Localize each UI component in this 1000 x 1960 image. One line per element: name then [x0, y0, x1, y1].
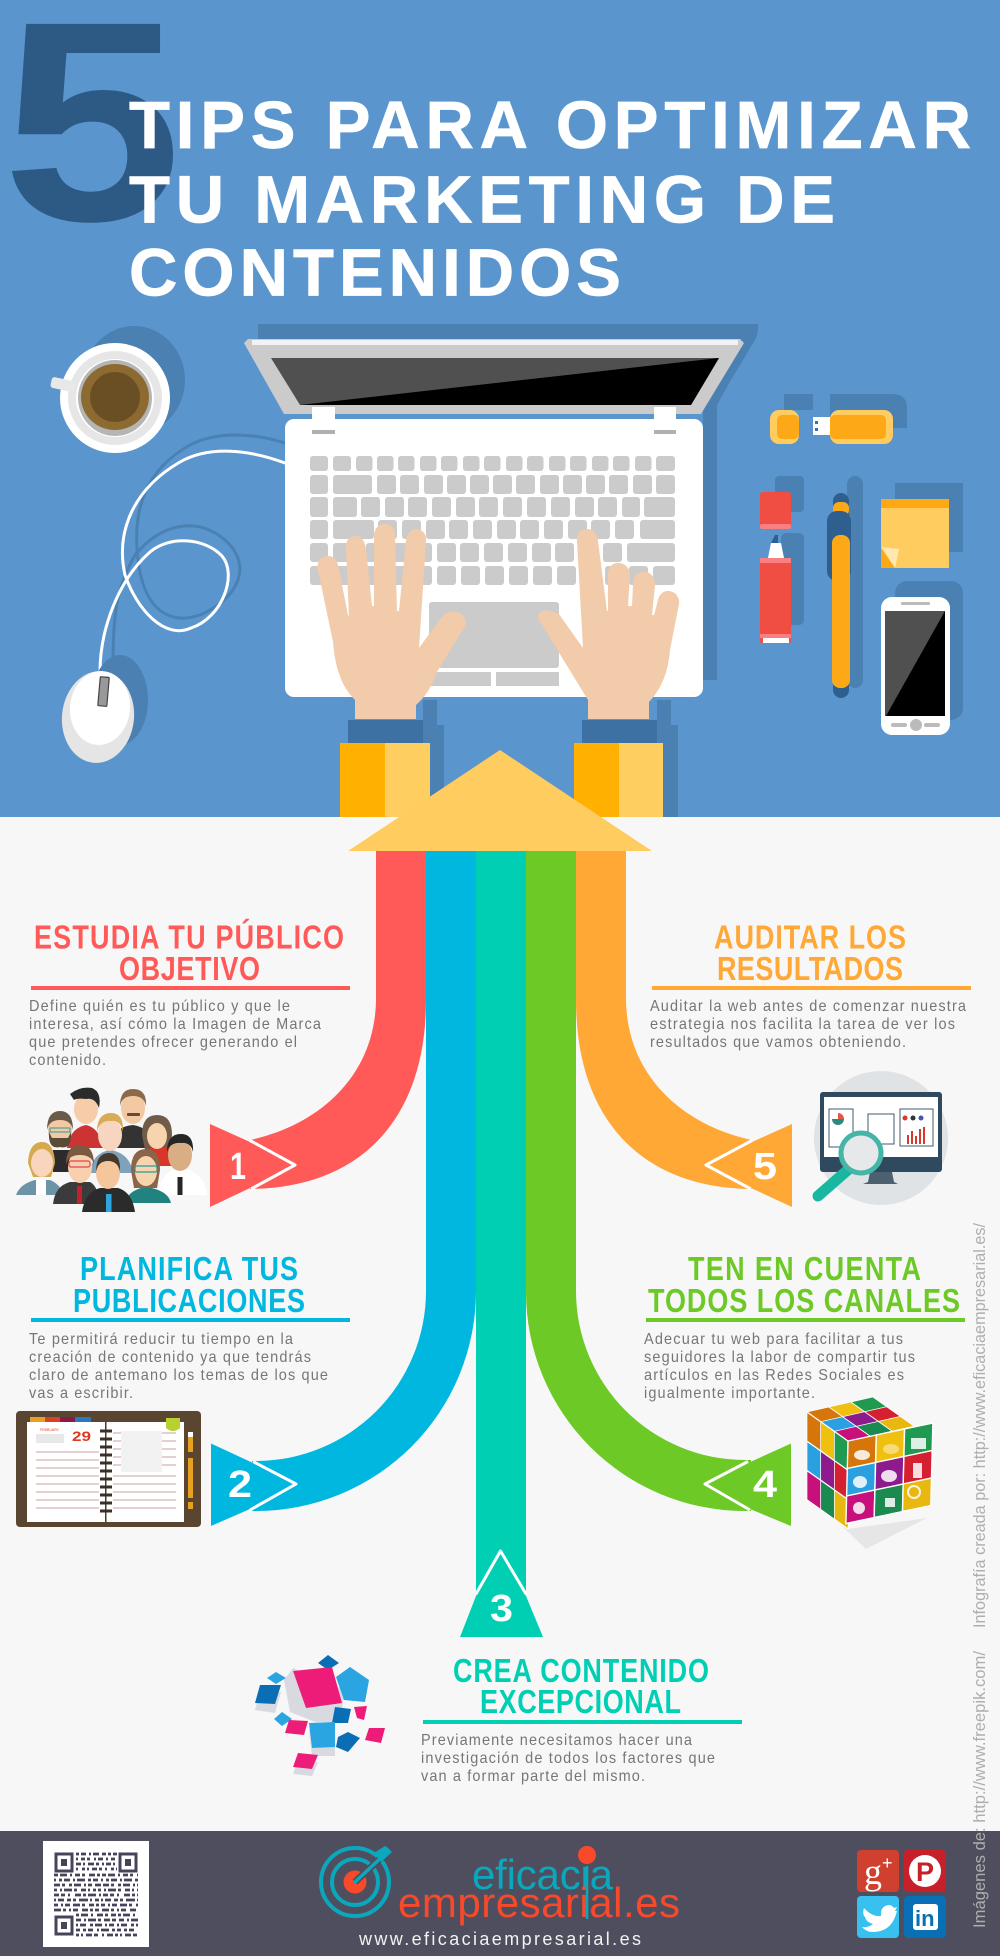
- qr code: [43, 1841, 149, 1947]
- credit: imágenes: Imágenes de: http://www.freepik.com/: [970, 1651, 989, 1928]
- heading: ten en cuenta todos los canales: TODOS LOS CANALES: [648, 1284, 960, 1320]
- icon: google plus: g: [864, 1852, 882, 1892]
- title: CONTENIDOS: [129, 236, 621, 310]
- icon: sticky note: [881, 483, 963, 568]
- text: tip 1 body: contenido.: [29, 1052, 106, 1069]
- text: tip 2 body: creación de contenido ya que tendrás: [29, 1349, 311, 1366]
- golden arrow head: [348, 750, 652, 851]
- text: tip 2 body: vas a escribir.: [29, 1385, 133, 1402]
- panel: tip 3: [421, 1654, 742, 1785]
- icon: pinterest: [904, 1850, 946, 1892]
- wordmark: eficacia: [472, 1851, 614, 1898]
- strip 3: straight teal ribbon: [476, 840, 526, 1594]
- left hand: [318, 524, 466, 719]
- icon: social media cube: [807, 1397, 933, 1549]
- panel: tip 5: [650, 920, 971, 1051]
- arrow 2: blue ribbon: 2: [228, 1464, 252, 1506]
- text: tip 4 body: igualmente importante.: [644, 1385, 815, 1402]
- logo: [321, 1846, 680, 1926]
- panel: tip 4: [644, 1252, 965, 1402]
- arrow 5: orange ribbon: [576, 840, 792, 1207]
- arrow 1: red ribbon: 1: [230, 1146, 246, 1188]
- icon: planner: FEBRUARY: [40, 1428, 60, 1432]
- text: tip 2 body: [29, 1331, 328, 1402]
- panel: tip 2: [29, 1252, 350, 1402]
- arrow 5: orange ribbon: 5: [753, 1146, 777, 1188]
- left sleeve: [340, 720, 430, 817]
- icon: floating cubes: [255, 1655, 385, 1776]
- arrow 3: teal triangle: [460, 1551, 543, 1637]
- text: tip 4 body: artículos en las Redes Sociales es: [644, 1367, 904, 1384]
- heading: crea contenido excepcional: [423, 1654, 742, 1724]
- text: tip 5 body: estrategia nos facilita la tarea de ver los: [650, 1016, 955, 1033]
- text: tip 1 body: interesa, así cómo la Imagen de Marca: [29, 1016, 322, 1033]
- text: tip 2 body: Te permitirá reducir tu tiempo en la: [29, 1331, 294, 1348]
- title: [129, 88, 971, 310]
- arm shadows: [423, 700, 678, 817]
- text: tip 4 body: [644, 1331, 915, 1402]
- text: tip 5 body: [650, 998, 967, 1051]
- text: tip 1 body: [29, 998, 322, 1069]
- keyboard: [310, 456, 675, 585]
- text: tip 4 body: Adecuar tu web para facilitar a tus: [644, 1331, 903, 1348]
- heading: auditar los resultados: RESULTADOS: [717, 952, 903, 988]
- heading: planifica tus publicaciones: [31, 1252, 350, 1322]
- icon: pinterest: P: [916, 1857, 934, 1887]
- text: tip 4 body: seguidores la labor de compartir tus: [644, 1349, 915, 1366]
- text: tip 3 body: [421, 1732, 715, 1785]
- text: tip 3 body: van a formar parte del mismo.: [421, 1768, 645, 1785]
- arrow 4: green ribbon: [526, 840, 791, 1526]
- heading: crea contenido excepcional: CREA CONTENIDO: [453, 1654, 709, 1690]
- icon: target: [321, 1846, 392, 1916]
- icon: group of people: [16, 1088, 207, 1212]
- heading: auditar los resultados: [652, 920, 971, 990]
- text: tip 2 body: claro de antemano los temas de los que: [29, 1367, 328, 1384]
- right sleeve: [574, 720, 663, 817]
- trackpad: [429, 602, 559, 686]
- title: TU MARKETING DE: [129, 162, 835, 238]
- arrow 1: red ribbon: [210, 840, 426, 1207]
- icon: planner: [16, 1411, 201, 1527]
- text: tip 3 body: Previamente necesitamos hacer una: [421, 1732, 693, 1749]
- arrow 3: teal triangle: 3: [490, 1588, 513, 1630]
- header background: [0, 0, 1000, 817]
- icon: google plus: [857, 1850, 899, 1892]
- icon: linkedin: in: [915, 1906, 935, 1931]
- icon: computer mouse: [57, 655, 148, 767]
- credit: infografía: Infografía creada por: http://www.eficaciaempresarial.es/: [970, 1223, 989, 1628]
- title: TIPS PARA OPTIMIZAR: [129, 88, 971, 163]
- arrow 4: green ribbon: 4: [753, 1464, 777, 1506]
- icon: coffee cup: [50, 326, 185, 453]
- heading: crea contenido excepcional: EXCEPCIONAL: [480, 1685, 681, 1721]
- footer bar: [0, 1831, 1000, 1956]
- heading: estudia tu público objetivo: [31, 919, 350, 990]
- heading: ten en cuenta todos los canales: [646, 1252, 965, 1322]
- text: tip 5 body: resultados que vamos obteniendo.: [650, 1034, 906, 1051]
- icon: linkedin: [904, 1896, 946, 1938]
- text: tip 3 body: investigación de todos los factores que: [421, 1750, 715, 1767]
- heading: estudia tu público objetivo: ESTUDIA TU PÚBLICO: [34, 919, 344, 956]
- heading: ten en cuenta todos los canales: TEN EN CUENTA: [688, 1252, 921, 1288]
- icon: usb stick: [770, 394, 907, 444]
- icon: planner: 29: [72, 1428, 91, 1444]
- icon: smartphone: [881, 581, 963, 735]
- arrow 2: blue ribbon: [211, 840, 476, 1526]
- icon: twitter: [857, 1896, 899, 1938]
- website url: www.eficaciaempresarial.es: [358, 1929, 641, 1949]
- mouse cable: [100, 435, 285, 672]
- heading: planifica tus publicaciones: PLANIFICA TUS: [80, 1252, 298, 1288]
- heading: estudia tu público objetivo: OBJETIVO: [119, 952, 260, 988]
- heading: auditar los resultados: AUDITAR LOS: [714, 920, 906, 956]
- heading: planifica tus publicaciones: PUBLICACIONES: [73, 1284, 305, 1320]
- panel: tip 1: [29, 919, 350, 1069]
- laptop: [244, 324, 758, 697]
- icon: monitor with magnifier: [814, 1071, 948, 1205]
- icon: google plus: +: [882, 1853, 893, 1873]
- icon: marker: [760, 476, 804, 643]
- text: tip 5 body: Auditar la web antes de comenzar nuestra: [650, 998, 967, 1015]
- text: tip 1 body: Define quién es tu público y que le: [29, 998, 290, 1015]
- icon: pencil: [827, 476, 863, 698]
- logo: empresarial.es: [398, 1879, 680, 1926]
- text: tip 1 body: que pretendes ofrecer generando el: [29, 1034, 297, 1051]
- right hand: [538, 529, 679, 719]
